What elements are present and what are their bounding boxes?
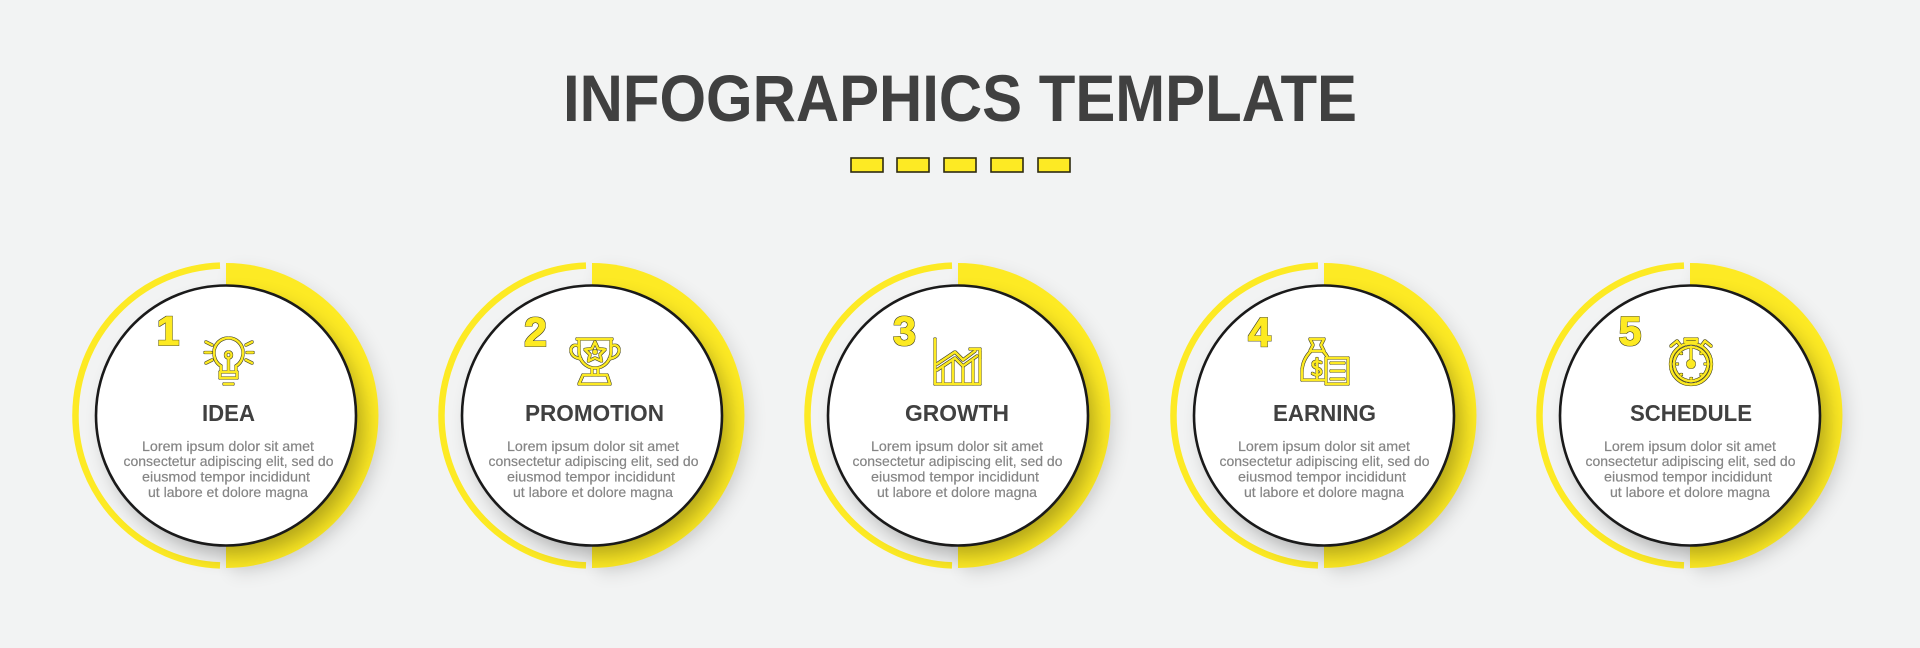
body text: Lorem ipsum dolor sit amet	[142, 438, 314, 454]
panel: earning	[1173, 263, 1482, 574]
circle card	[462, 286, 722, 546]
panel: promotion	[441, 263, 750, 574]
body text: eiusmod tempor incididunt	[1238, 468, 1406, 484]
body text: eiusmod tempor incididunt	[142, 468, 310, 484]
body text: ut labore et dolore magna	[1244, 484, 1404, 500]
circle card	[1560, 286, 1820, 546]
body text: Lorem ipsum dolor sit amet	[871, 438, 1043, 454]
panel: schedule	[1539, 263, 1848, 574]
icon: stopwatch	[1670, 339, 1712, 384]
heading: PROMOTION	[525, 400, 664, 426]
number: 2	[524, 309, 547, 355]
body text: consectetur adipiscing elit, sed do	[1220, 453, 1430, 469]
body text: Lorem ipsum dolor sit amet	[1238, 438, 1410, 454]
icon: growth chart	[935, 339, 980, 384]
panel: idea	[75, 263, 384, 574]
body text	[852, 438, 1063, 500]
number: 3	[893, 308, 916, 354]
circle card	[828, 286, 1088, 546]
body text: eiusmod tempor incididunt	[1604, 468, 1772, 484]
number: 5	[1619, 308, 1641, 354]
body text: eiusmod tempor incididunt	[507, 468, 675, 484]
panel: growth	[807, 263, 1116, 574]
body text	[488, 438, 699, 500]
title dashes	[851, 158, 1070, 172]
body text: ut labore et dolore magna	[877, 484, 1037, 500]
heading: IDEA	[202, 400, 255, 426]
body text: consectetur adipiscing elit, sed do	[1586, 453, 1796, 469]
body text: eiusmod tempor incididunt	[871, 468, 1039, 484]
circle card	[1194, 286, 1454, 546]
body text	[1220, 438, 1430, 500]
body text: Lorem ipsum dolor sit amet	[1604, 438, 1776, 454]
body text: ut labore et dolore magna	[513, 484, 673, 500]
body text: Lorem ipsum dolor sit amet	[507, 438, 679, 454]
body text: consectetur adipiscing elit, sed do	[488, 453, 699, 469]
icon: light bulb	[205, 338, 253, 384]
body text: ut labore et dolore magna	[148, 484, 308, 500]
heading: SCHEDULE	[1630, 400, 1752, 426]
heading: EARNING	[1273, 400, 1376, 426]
body text: ut labore et dolore magna	[1610, 484, 1770, 500]
body text: consectetur adipiscing elit, sed do	[124, 453, 334, 469]
number: 1	[157, 308, 179, 354]
number: 4	[1248, 309, 1271, 355]
circle card	[96, 286, 356, 546]
icon: trophy	[571, 339, 619, 384]
heading: GROWTH	[905, 400, 1009, 426]
body text: consectetur adipiscing elit, sed do	[852, 453, 1063, 469]
body text	[1586, 438, 1796, 500]
icon: money bag	[1302, 339, 1348, 384]
title: INFOGRAPHICS TEMPLATE	[563, 61, 1357, 135]
body text	[124, 438, 334, 500]
